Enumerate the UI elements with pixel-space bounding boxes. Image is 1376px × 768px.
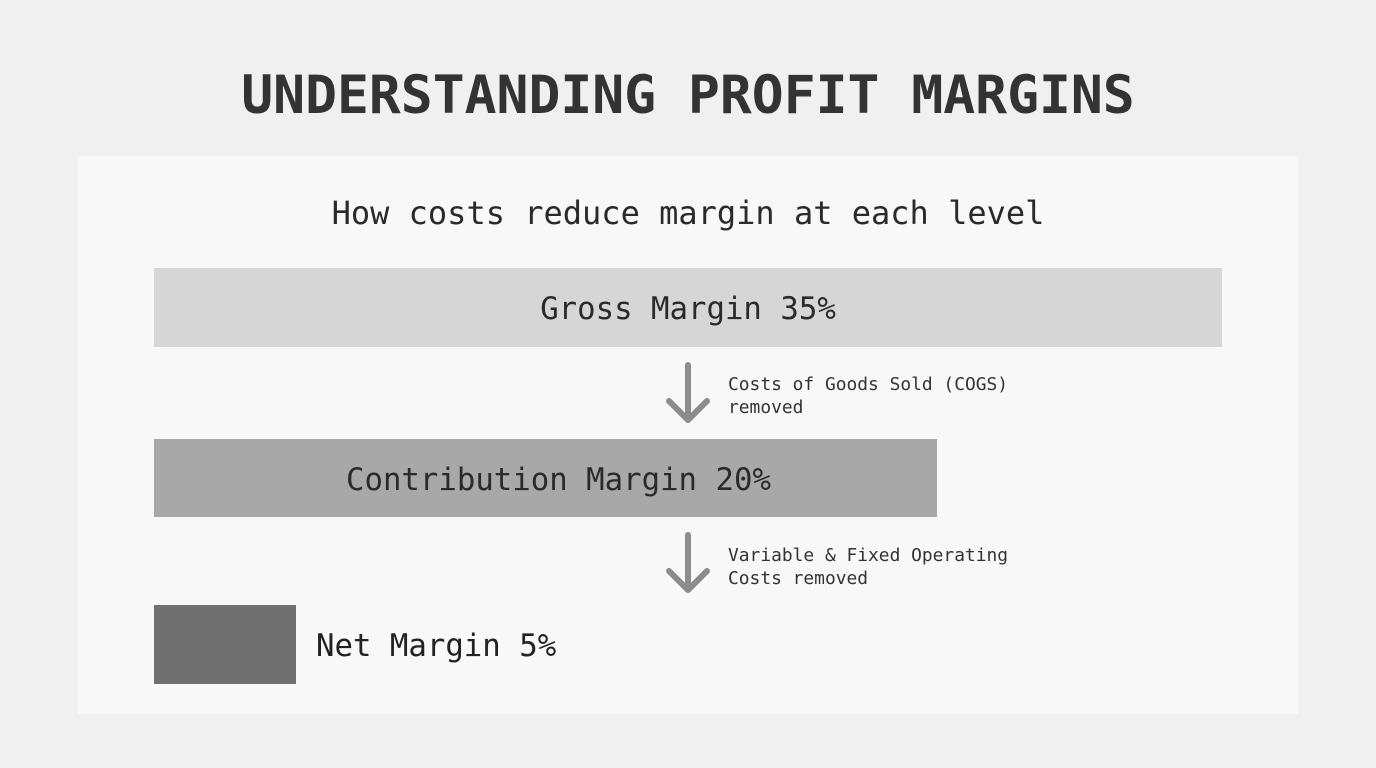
label: net margin: Net Margin 5%: [316, 629, 556, 664]
bar: net margin: [154, 605, 296, 684]
label: contribution margin: Contribution Margin 20%: [346, 463, 771, 498]
panel: margin chart: [78, 156, 1298, 714]
label: gross margin: Gross Margin 35%: [540, 292, 836, 327]
annotation: COGS: Costs of Goods Sold (COGS): [728, 374, 1008, 395]
bar: contribution margin: [154, 439, 937, 517]
annotation: operating costs: Costs removed: [728, 568, 868, 588]
annotation: COGS: [728, 374, 1008, 418]
arrow: operating costs: [666, 532, 710, 593]
arrow: COGS: [666, 362, 710, 423]
annotation: COGS: removed: [728, 396, 803, 418]
annotation: operating costs: Variable & Fixed Operating: [728, 545, 1008, 566]
bar: gross margin: [154, 268, 1222, 347]
subtitle: How costs reduce margin at each level: [332, 194, 1044, 232]
annotation: operating costs: [728, 545, 1008, 588]
title: UNDERSTANDING PROFIT MARGINS: [241, 65, 1135, 126]
